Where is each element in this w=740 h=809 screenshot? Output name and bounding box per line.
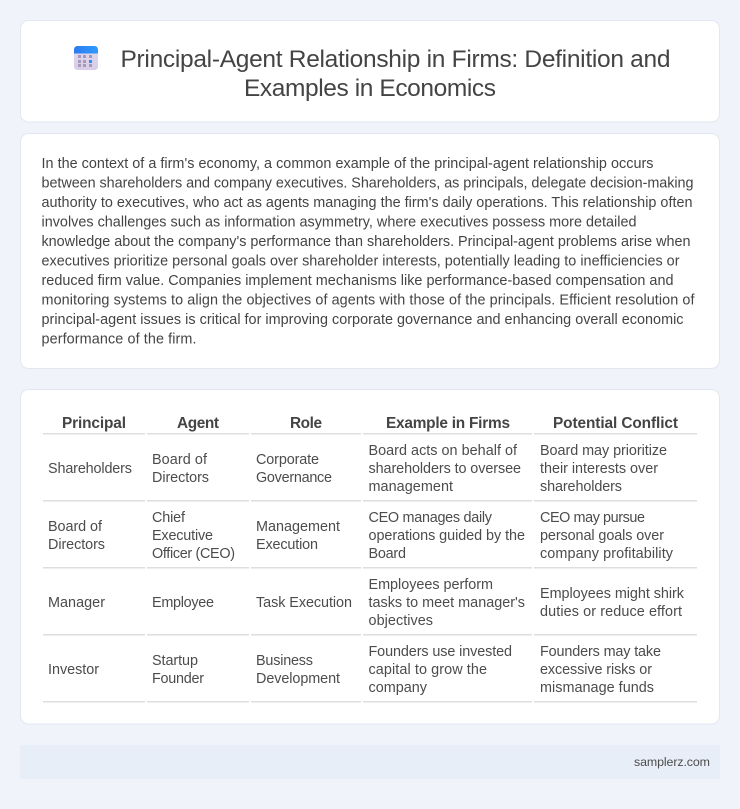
table row: shareholders: Board of: [152, 452, 208, 468]
table row: manager: Employee: [152, 595, 214, 611]
table row: board of directors: CEO manages daily: [368, 510, 493, 526]
table row: manager: Manager: [48, 595, 105, 611]
footer: [20, 745, 720, 779]
table row: investor: Founder: [152, 671, 204, 687]
table row: manager: Task Execution: [256, 595, 352, 611]
table row: board of directors: Chief: [152, 510, 186, 526]
table row: shareholders: Board may prioritize: [540, 443, 667, 459]
table row: shareholders: Directors: [152, 470, 209, 486]
table row: investor: company: [368, 680, 428, 696]
table row: board of directors: Board: [368, 546, 406, 562]
table row: manager: duties or reduce effort: [540, 604, 682, 620]
table row: shareholders: Shareholders: [48, 461, 132, 477]
table row: shareholders: [48, 443, 667, 495]
text block: description paragraph: performance of the firm.: [42, 332, 196, 348]
table row: investor: mismanage funds: [540, 680, 654, 696]
table row: manager: tasks to meet manager's: [368, 595, 525, 611]
table row: board of directors: Board of: [48, 519, 103, 535]
table row: shareholders: Board acts on behalf of: [368, 443, 518, 459]
text block: description paragraph: involves challenges such as information asymmetry, where executives possess more detailed: [42, 214, 636, 230]
table row: board of directors: personal goals over: [540, 528, 664, 544]
icon: calendar: [74, 46, 98, 70]
table row: manager: Employees perform: [368, 577, 493, 593]
table row: board of directors: Execution: [256, 537, 318, 553]
table row: board of directors: Directors: [48, 537, 105, 553]
title: Principal-Agent Relationship in Firms: Definition and: [120, 46, 670, 73]
table row: board of directors: company profitability: [540, 546, 674, 562]
panel: title card: [20, 20, 720, 122]
table row: investor: excessive risks or: [540, 662, 652, 678]
footer credit: samplerz.com: [634, 755, 710, 769]
table row: investor: [48, 644, 661, 696]
table row: board of directors: operations guided by the: [368, 528, 525, 544]
table row: investor: Startup: [152, 653, 198, 669]
table row: investor: capital to grow the: [368, 662, 487, 678]
table row: investor: Investor: [48, 662, 99, 678]
table row: shareholders: management: [368, 479, 453, 495]
text block: description paragraph: between shareholders and company executives. Shareholders, as principals, delegate decision-making: [42, 176, 694, 192]
text block: description paragraph: In the context of a firm's economy, a common example of the principal-agent relationship occurs: [42, 156, 654, 172]
text block: description paragraph: principal-agent issues is critical for improving corporate governance and enhancing overall economic: [42, 312, 684, 328]
panel: description: [20, 134, 720, 368]
table row: manager: objectives: [368, 613, 433, 629]
table row: manager: [48, 577, 685, 629]
table header: [62, 415, 678, 432]
table row: shareholders: shareholders: [540, 479, 622, 495]
panel: table card: [20, 390, 720, 724]
text block: description paragraph: reduced firm value. Companies implement mechanisms like performance-based compensation and: [42, 273, 674, 289]
table row: investor: Business: [256, 653, 313, 669]
table row: manager: Employees might shirk: [540, 586, 685, 602]
table row: investor: Founders use invested: [368, 644, 512, 660]
table row: shareholders: shareholders to oversee: [368, 461, 521, 477]
table row: investor: Founders may take: [540, 644, 661, 660]
text block: description paragraph: authority to executives, who act as agents managing the firm's daily operations. This relationship often: [42, 195, 692, 211]
title: Examples in Economics: [244, 75, 496, 102]
table row: shareholders: Governance: [256, 470, 332, 486]
table header: Example in Firms: [386, 415, 510, 432]
title: [120, 46, 670, 102]
table header: Principal: [62, 415, 126, 432]
table header: Potential Conflict: [553, 415, 678, 432]
table header: Role: [290, 415, 322, 432]
table row: investor: Development: [256, 671, 340, 687]
table row: board of directors: Management: [256, 519, 340, 535]
table header: Agent: [177, 415, 219, 432]
table row: board of directors: [48, 510, 674, 562]
table row: board of directors: CEO may pursue: [540, 510, 645, 526]
text block: description paragraph: knowledge about the company's performance than shareholders. Principal-agent problems arise when: [42, 234, 690, 250]
table row: shareholders: their interests over: [540, 461, 658, 477]
table row: board of directors: Officer (CEO): [152, 546, 235, 562]
text block: description paragraph: executives prioritize personal goals over shareholder interests, potentially leading to inefficiencies or: [42, 254, 680, 270]
text block: description paragraph: [42, 156, 696, 348]
table row: shareholders: Corporate: [256, 452, 319, 468]
text block: description paragraph: monitoring systems to align the objectives of agents with those of the principals. Efficient resolution of: [42, 292, 696, 308]
table row: board of directors: Executive: [152, 528, 213, 544]
